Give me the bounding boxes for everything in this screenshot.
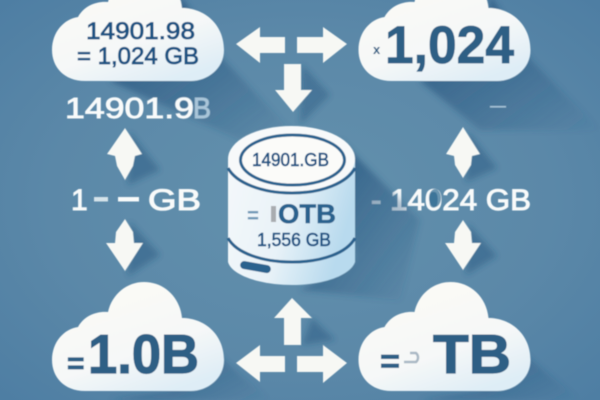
arrow: top right bbox=[297, 27, 347, 63]
arrow: right lower bbox=[445, 220, 497, 275]
cylinder body bbox=[228, 160, 355, 285]
cylinder top bbox=[228, 126, 355, 192]
arrow: left upper bbox=[107, 128, 160, 185]
cylinder text: 14901.GB: 14901.GB bbox=[252, 150, 329, 170]
cloud text: TB: TB bbox=[433, 323, 511, 385]
cylinder band lines bbox=[228, 238, 355, 262]
arrow: top left bbox=[236, 27, 285, 63]
arrow: bottom right bbox=[297, 345, 347, 383]
cloud: top left bbox=[52, 0, 300, 140]
top ring bbox=[240, 135, 344, 185]
cloud text: 1,024: 1,024 bbox=[385, 16, 514, 75]
cylinder text: 1,556 GB: 1,556 GB bbox=[257, 230, 331, 250]
label: 1 -- GB: GB bbox=[148, 184, 201, 217]
label: 14901.9B: 14901.9 bbox=[65, 93, 194, 125]
cloud text: =: = bbox=[380, 343, 400, 379]
label: - 14024 GB: - 14024 GB bbox=[371, 184, 531, 217]
cylinder text: =: = bbox=[247, 203, 259, 228]
cloud text: x: x bbox=[373, 42, 381, 57]
storage cylinder bbox=[228, 126, 420, 300]
cloud text: =: = bbox=[67, 347, 85, 380]
label: 1 -- GB: 1 bbox=[71, 184, 88, 217]
faint highlight mark bbox=[490, 106, 506, 108]
arrow: left lower bbox=[106, 219, 160, 276]
cloud text: 14901.98: 14901.98 bbox=[86, 18, 195, 45]
cloud: top right bbox=[358, 0, 600, 130]
cloud glyph smudge bbox=[404, 353, 418, 362]
cloud text: 1.0B: 1.0B bbox=[88, 323, 199, 385]
label: 1 -- GB bbox=[71, 184, 201, 217]
arrow: bottom left bbox=[236, 345, 285, 382]
cloud text: = 1,024 GB: = 1,024 GB bbox=[77, 43, 199, 70]
cloud: bottom left bbox=[52, 282, 270, 400]
cylinder smudge bbox=[271, 206, 276, 222]
drive slot bbox=[240, 260, 271, 274]
arrow: right upper bbox=[446, 127, 497, 182]
cloud: bottom right bbox=[358, 282, 580, 400]
cylinder text: OTB: OTB bbox=[278, 199, 336, 229]
label: 14901.9B: B bbox=[193, 93, 211, 125]
arrow: bottom up bbox=[274, 298, 335, 345]
arrow: top down bbox=[275, 64, 330, 125]
